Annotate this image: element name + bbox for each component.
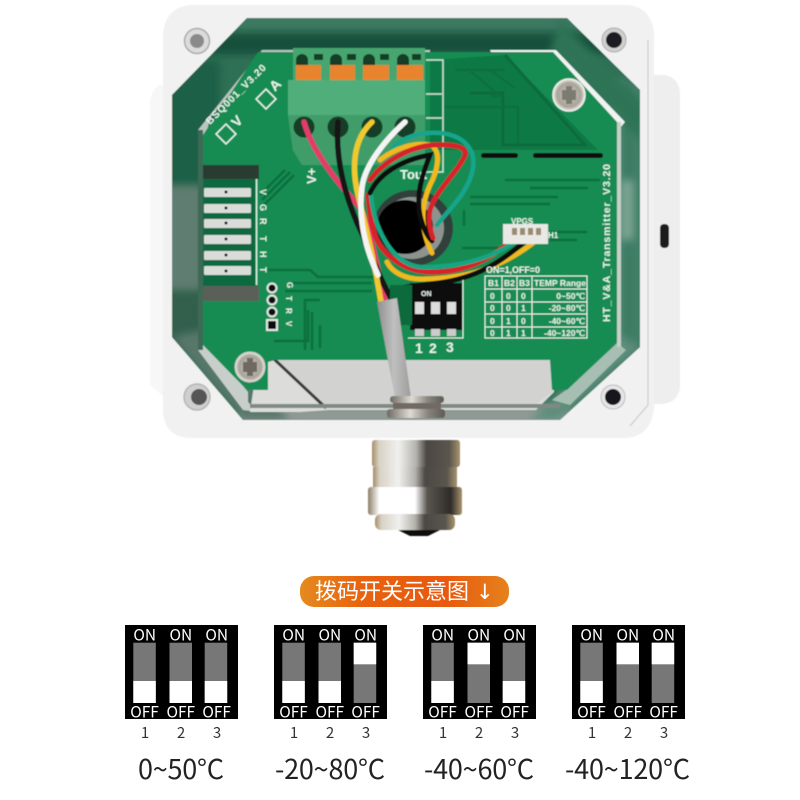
header holes G T R V (267, 282, 294, 330)
DIP switch on board: 3 (446, 339, 454, 355)
silkscreen temperature range table: -20~80℃ (549, 303, 585, 313)
silkscreen temperature range table (485, 265, 587, 338)
DIP setting: -40~60°C: 2 (475, 722, 483, 743)
silkscreen: product name: HT_V&A_Transmitter_V3.20 (601, 164, 613, 322)
DIP setting: -20~80°C: 1 (290, 722, 298, 743)
silkscreen temperature range table: -40~120℃ (544, 328, 585, 338)
silkscreen temperature range table: 0 (490, 316, 495, 326)
silkscreen: board name and V A markers: BSQ001_V3.20 (204, 62, 269, 127)
waterproof cable gland (368, 440, 462, 536)
left edge connector pads: R (258, 218, 268, 225)
silkscreen temperature range table: 1 (506, 316, 511, 326)
JST sensor connector: VPGS (511, 217, 534, 226)
DIP setting: -40~120°C: -40~120°C (565, 748, 690, 787)
DIP setting: -40~60°C (423, 624, 536, 787)
header holes G T R V: R (284, 308, 293, 314)
DIP setting: -40~60°C: OFF (500, 700, 529, 722)
PCB copper areas and traces (260, 55, 600, 350)
enclosure outer aluminium frame (163, 5, 654, 438)
DIP setting: -40~120°C: OFF (577, 700, 606, 722)
DIP setting: -40~120°C: 2 (624, 722, 632, 743)
DIP setting: -40~120°C: ON (616, 624, 639, 646)
DIP switch on board: 1 (415, 340, 423, 356)
silkscreen temperature range table: B1 (488, 278, 499, 288)
DIP setting: -40~60°C: -40~60°C (424, 748, 534, 787)
DIP setting: -20~80°C: -20~80°C (275, 748, 385, 787)
DIP setting: 0~50°C: 2 (177, 722, 185, 743)
corner holes (184, 28, 626, 410)
bright lip around the board (198, 50, 626, 412)
DIP switch on board: ON (421, 291, 432, 298)
DIP setting: -40~60°C: ON (431, 624, 454, 646)
grey sensor cable (377, 298, 411, 398)
DIP setting: 0~50°C: 3 (213, 722, 221, 743)
DIP setting: -40~60°C: ON (503, 624, 526, 646)
JST sensor connector: H1 (548, 231, 559, 240)
silkscreen temperature range table: 0~50℃ (556, 291, 585, 301)
enclosure side flanges (150, 75, 680, 404)
DIP setting: -20~80°C: OFF (279, 700, 308, 722)
DIP setting: 0~50°C: OFF (202, 700, 231, 722)
left edge connector pads: H (258, 251, 268, 258)
silkscreen temperature range table: 1 (506, 328, 511, 338)
cable gland inner nut (387, 396, 445, 418)
DIP setting: -40~60°C: 3 (511, 722, 519, 743)
JST sensor connector (503, 217, 559, 244)
DIP setting: -40~60°C: 1 (439, 722, 447, 743)
silkscreen: terminal labels (304, 167, 428, 184)
orange heading pill: ↓ (476, 580, 494, 604)
silkscreen temperature range table: TEMP Range (534, 278, 586, 288)
silkscreen: board name and V A markers: A (266, 76, 284, 94)
DIP setting: 0~50°C: ON (133, 624, 156, 646)
silkscreen temperature range table: B3 (519, 278, 530, 288)
silkscreen temperature range table: 0 (490, 303, 495, 313)
DIP setting: -20~80°C: OFF (315, 700, 345, 722)
left edge connector pads: T (258, 236, 268, 242)
DIP setting: -20~80°C: ON (318, 624, 341, 646)
silkscreen temperature range table: -40~60℃ (549, 316, 585, 326)
DIP setting: -20~80°C: 3 (362, 722, 370, 743)
silkscreen temperature range table: 0 (506, 291, 511, 301)
silkscreen temperature range table: 0 (490, 328, 495, 338)
PCB slots (481, 153, 603, 158)
silver base plate behind PCB (250, 358, 560, 412)
DIP setting: -40~120°C: OFF (649, 700, 678, 722)
inner wall of enclosure (160, 10, 660, 430)
mounting screws (235, 79, 585, 382)
product photo: opened transmitter enclosure (150, 5, 680, 536)
terminal block (288, 48, 443, 172)
DIP setting: -40~60°C: ON (467, 624, 490, 646)
PCB board (203, 52, 617, 390)
silkscreen: board name and V A markers (204, 62, 284, 144)
DIP setting: 0~50°C: 1 (141, 722, 149, 743)
DIP setting: 0~50°C: ON (169, 624, 192, 646)
wires (304, 122, 533, 302)
cable entry hole (373, 190, 453, 266)
DIP setting: 0~50°C: ON (205, 624, 228, 646)
DIP setting: -40~120°C: 3 (660, 722, 668, 743)
silkscreen temperature range table: B2 (504, 278, 515, 288)
silkscreen: board name and V A markers: V (228, 112, 246, 130)
DIP setting: -40~60°C: OFF (428, 700, 457, 722)
left edge connector pads (203, 165, 268, 301)
silkscreen temperature range table: 0 (506, 303, 511, 313)
silkscreen temperature range table: 0 (521, 291, 526, 301)
DIP switch on board: 2 (429, 340, 437, 356)
DIP setting: -40~60°C: OFF (464, 700, 494, 722)
header holes G T R V: T (284, 296, 293, 301)
DIP setting: -40~120°C (565, 624, 690, 787)
DIP setting: 0~50°C: 0~50°C (138, 748, 224, 787)
header holes G T R V: V (284, 321, 293, 327)
left edge connector pads: V (258, 189, 268, 195)
silkscreen temperature range table: 0 (521, 316, 526, 326)
DIP setting: -20~80°C: ON (354, 624, 377, 646)
left edge connector pads: G (258, 204, 268, 211)
DIP setting: 0~50°C: OFF (166, 700, 196, 722)
silkscreen: terminal labels: V+ (304, 167, 319, 184)
DIP setting: -40~120°C: OFF (613, 700, 643, 722)
DIP setting: -40~120°C: 1 (588, 722, 596, 743)
DIP setting: -20~80°C: ON (282, 624, 305, 646)
DIP setting: -20~80°C: 2 (326, 722, 334, 743)
DIP setting: 0~50°C (125, 624, 238, 787)
DIP setting: 0~50°C: OFF (130, 700, 159, 722)
DIP setting: -20~80°C: OFF (351, 700, 380, 722)
silkscreen temperature range table: 0 (490, 291, 495, 301)
silkscreen temperature range table: 1 (521, 328, 526, 338)
DIP setting: -40~120°C: ON (580, 624, 603, 646)
DIP switch on board (390, 280, 463, 356)
DIP setting: -20~80°C (274, 624, 387, 787)
silkscreen temperature range table: 1 (521, 303, 526, 313)
silkscreen temperature range table: ON=1,OFF=0 (486, 265, 540, 275)
DIP setting: -40~120°C: ON (652, 624, 675, 646)
orange heading pill: 拨码开关示意图 (315, 574, 469, 606)
header holes G T R V: G (285, 282, 294, 288)
left edge connector pads: T (258, 267, 268, 273)
silkscreen: terminal labels: Tout (400, 167, 428, 182)
